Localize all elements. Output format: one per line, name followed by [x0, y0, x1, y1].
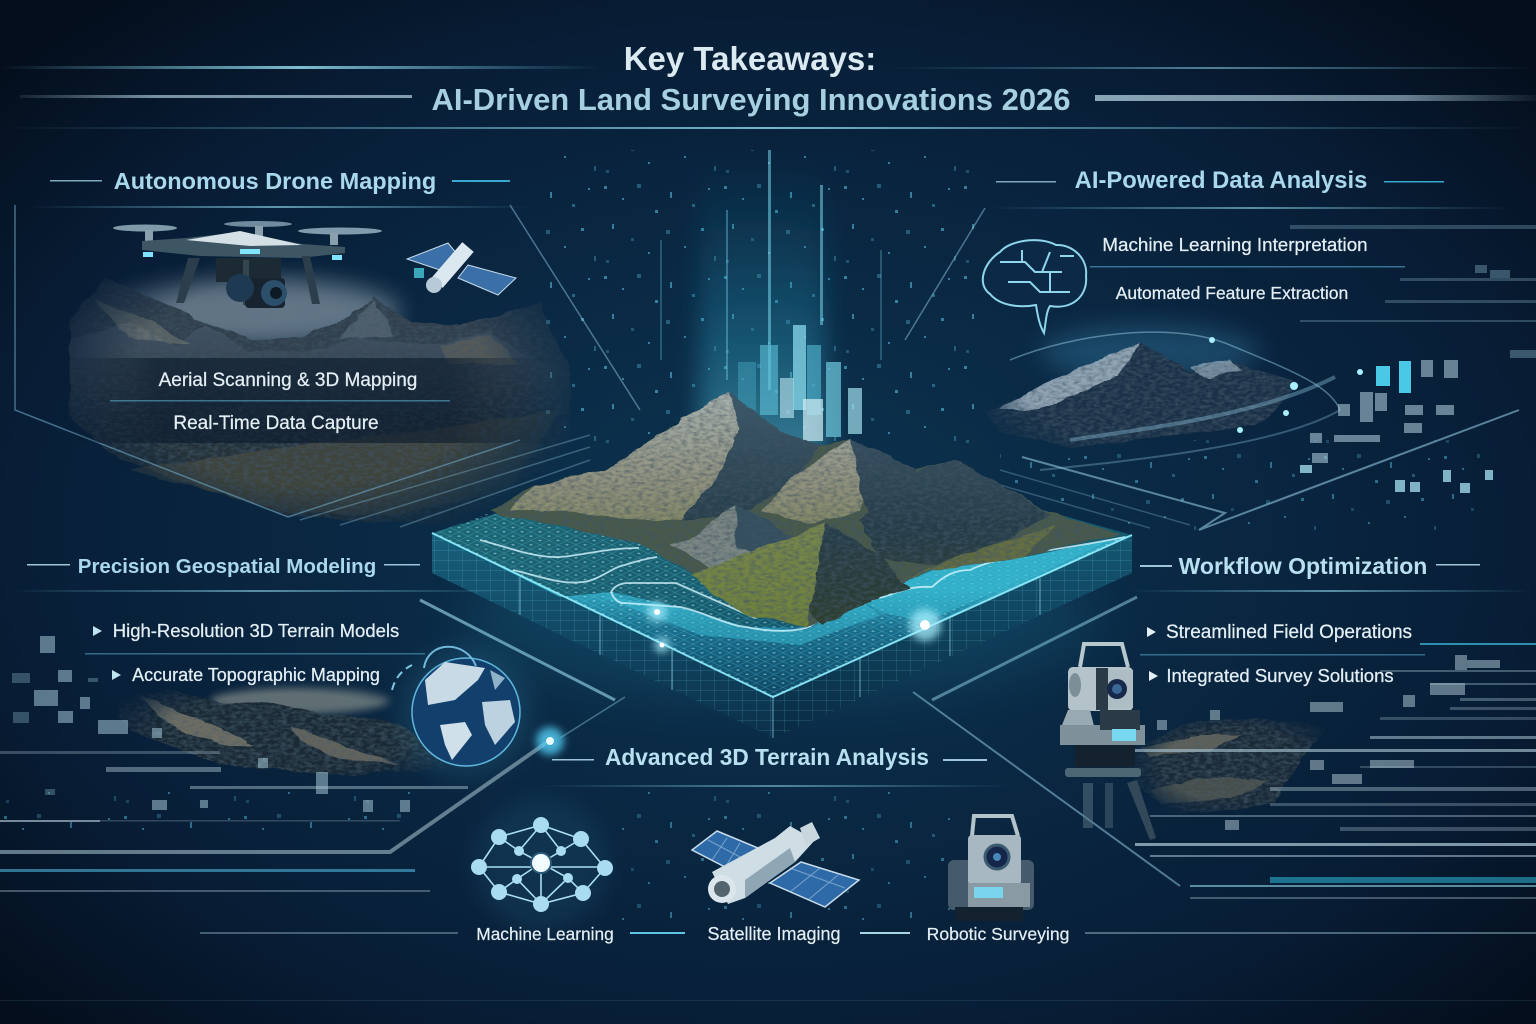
block glow — [460, 540, 1100, 700]
text: aerial scanning: Aerial Scanning & 3D Mapping — [159, 370, 417, 391]
title accent lines — [0, 66, 1536, 129]
heading: geospatial modeling: Precision Geospatial Modeling — [78, 555, 376, 578]
title: AI-Driven Land Surveying Innovations 2026 — [431, 82, 1071, 117]
icon: satellite — [407, 243, 516, 295]
icon: machine learning network — [471, 799, 613, 931]
panel: Precision Geospatial Modeling — [0, 555, 532, 892]
block pillars — [520, 577, 1040, 738]
icon: globe — [392, 646, 532, 778]
data blocks right — [1290, 225, 1536, 493]
heading rules — [30, 180, 530, 208]
icon: satellite large — [692, 822, 859, 907]
bullet: integrated survey solutions: Integrated Survey Solutions — [1166, 665, 1394, 686]
title: Key Takeaways: — [624, 40, 876, 77]
background data rain — [0, 150, 1480, 920]
connector lines — [0, 205, 1519, 886]
panel frame line — [15, 205, 520, 517]
bullet: topographic mapping: Accurate Topographic Mapping — [132, 665, 380, 685]
text: machine learning: Machine Learning — [476, 924, 614, 944]
landscape: right mountain — [985, 324, 1363, 470]
heading: data analysis: AI-Powered Data Analysis — [1075, 167, 1367, 194]
front peak lit — [690, 523, 825, 627]
heading rules — [540, 759, 1010, 787]
central 3D terrain block — [432, 392, 1132, 738]
panel: Advanced 3D Terrain Analysis — [200, 744, 1536, 944]
city skyline — [738, 325, 862, 441]
text: robotic surveying: Robotic Surveying — [927, 924, 1069, 944]
third peak — [860, 458, 1050, 565]
block left side — [432, 533, 774, 738]
streaks right — [1130, 643, 1536, 899]
text: automated feature extraction: Automated Feature Extraction — [1116, 283, 1348, 303]
central light beam — [660, 150, 882, 460]
bullet: streamlined field operations: Streamlined Field Operations — [1166, 622, 1412, 643]
text: real-time data capture: Real-Time Data Capture — [173, 413, 379, 434]
data blocks left — [0, 636, 468, 892]
heading: drone mapping: Autonomous Drone Mapping — [114, 168, 436, 194]
panel: Workflow Optimization — [1060, 553, 1536, 899]
text band — [60, 358, 550, 443]
second peak shadow — [851, 438, 918, 515]
main peak dark face — [680, 392, 820, 520]
landscape: lower left mountains — [110, 686, 450, 775]
panel: Autonomous Drone Mapping — [15, 168, 570, 525]
water and grid — [432, 513, 1132, 697]
bottom rules — [200, 932, 1536, 934]
glow accent node — [536, 727, 564, 755]
faint bottom rule — [0, 1000, 1536, 1001]
text: satellite imaging: Satellite Imaging — [707, 924, 841, 944]
mountains — [490, 392, 1120, 627]
icon: drone — [113, 221, 382, 308]
bullet: high-resolution terrain: High-Resolution 3D Terrain Models — [113, 620, 399, 641]
small peak shadow — [735, 503, 790, 555]
main peak lit face — [510, 392, 740, 520]
heading: workflow optimization: Workflow Optimization — [1179, 553, 1427, 579]
heading rules — [990, 181, 1510, 209]
icon: robotic total station — [948, 816, 1034, 921]
block right side — [773, 535, 1132, 738]
heading rules — [10, 564, 510, 592]
icon: total station — [1060, 644, 1156, 840]
landscape: mountains under drone — [70, 278, 570, 525]
front peak shadow — [800, 523, 910, 625]
panel: AI-Powered Data Analysis — [983, 167, 1536, 493]
sparkle lights — [647, 602, 941, 653]
landscape: lower right — [1130, 718, 1330, 815]
icon: brain — [983, 240, 1086, 333]
land base — [490, 392, 1120, 627]
heading rules — [1130, 564, 1530, 592]
text: machine learning interpretation: Machine Learning Interpretation — [1102, 234, 1368, 255]
heading: terrain analysis: Advanced 3D Terrain Analysis — [605, 744, 929, 770]
small peak — [670, 503, 790, 570]
second peak — [762, 438, 868, 525]
block top surface — [432, 470, 1132, 697]
title — [431, 40, 1071, 117]
